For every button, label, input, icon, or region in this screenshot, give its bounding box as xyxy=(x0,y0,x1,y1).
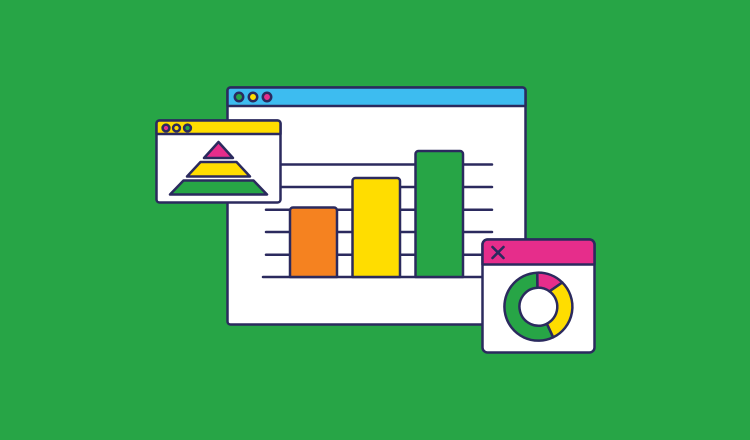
donut window title bar xyxy=(482,240,594,264)
pyramid chart xyxy=(170,142,267,194)
donut window body xyxy=(482,240,594,352)
bar: orange xyxy=(290,208,337,277)
donut segment: yellow xyxy=(547,282,572,337)
main window body xyxy=(228,88,526,324)
main window title bar xyxy=(228,88,526,106)
icon: pyramid window control dots xyxy=(163,125,191,131)
pyramid window title bar xyxy=(156,120,280,134)
pyramid window body xyxy=(156,120,280,202)
donut segment: green xyxy=(504,273,553,341)
icon: close X xyxy=(492,247,504,258)
pyramid middle tier xyxy=(187,162,250,176)
pyramid bottom tier xyxy=(170,180,267,194)
chart grid lines xyxy=(263,164,492,277)
bar: yellow xyxy=(352,178,400,277)
donut chart xyxy=(504,273,572,341)
donut segment: pink xyxy=(537,273,562,291)
icon: main window control dots xyxy=(235,93,271,101)
panel: donut window xyxy=(482,240,594,352)
pyramid top tier xyxy=(204,142,233,158)
bar: green xyxy=(416,151,463,277)
panel: pyramid window xyxy=(156,120,280,202)
panel: main browser window xyxy=(228,88,526,324)
bar chart xyxy=(290,151,463,277)
